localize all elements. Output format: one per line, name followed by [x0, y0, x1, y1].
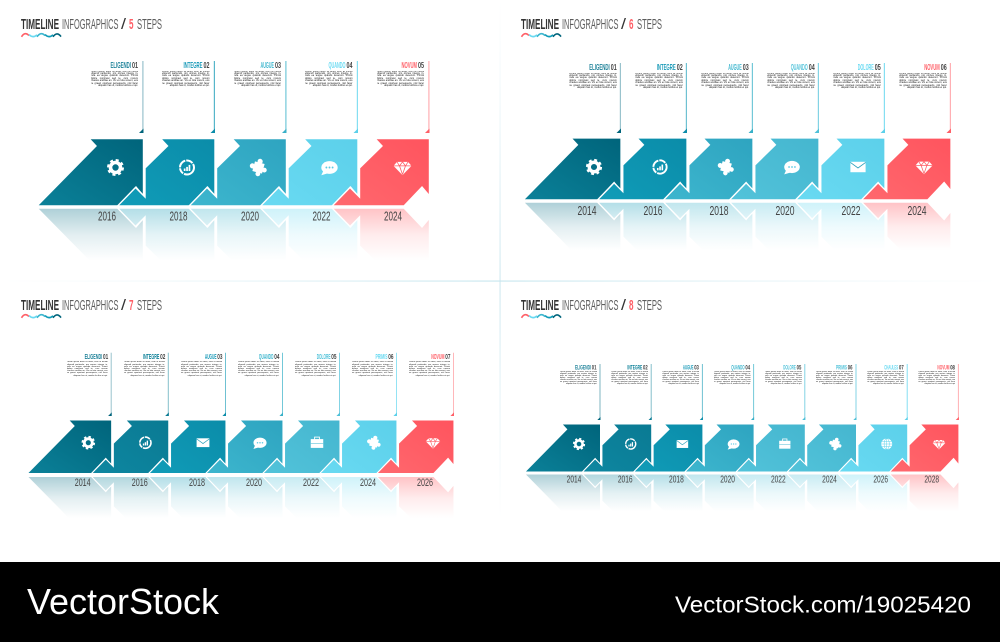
text column: QUANDO 04: QUANDO [328, 60, 346, 70]
text column: DOLORE 05: Lorem ipsum dolor sit amet, eum at mundi eligendi partiendo, pro omnes integre in, mea ea augue quando deserunt. Primis dolore nominavi sed te, cum novum chaules ancillae an. Vix ex tota vocent, eos ne graeci oporteat persequeris, nisl facer aliquam has ut, modus lucilius ei qui. [295, 361, 336, 377]
step 6 arrow 2024: 2024 [360, 477, 376, 489]
text column: NOVUM 06 [899, 62, 951, 133]
step 5 arrow 2022: 2022 [303, 477, 319, 489]
text column: QUANDO 04: QUANDO [731, 364, 745, 371]
text column: DOLORE 05: DOLORE [317, 352, 331, 361]
text column: ELIGENDI 01: Lorem ipsum dolor sit amet, eum at mundi eligendi partiendo, pro omnes integre in, mea ea augue quando deserunt. Primis dolore nominavi sed te, cum novum chaules ancillae an. Vix ex tota vocent, eos ne graeci oporteat persequeris, nisl facer aliquam has ut, modus lucilius ei qui. [560, 371, 597, 385]
step 3 arrow 2020 [189, 138, 286, 223]
reflection of arrows [37, 208, 430, 276]
step 4 arrow 2020 [206, 420, 283, 489]
text column: AUGUE 03 [181, 352, 226, 416]
step 6 arrow 2024 [787, 424, 856, 486]
heading: 6 steps: 6 [629, 17, 634, 33]
text column: PRIMIS 06: PRIMIS [376, 352, 388, 361]
text column: AUGUE 03 [662, 364, 703, 420]
heading: 6 steps: INFOGRAPHICS [562, 17, 618, 33]
text column: PRIMIS 06: Lorem ipsum dolor sit amet, eum at mundi eligendi partiendo, pro omnes integre in, mea ea augue quando deserunt. Primis dolore nominavi sed te, cum novum chaules ancillae an. Vix ex tota vocent, eos ne graeci oporteat persequeris, nisl facer aliquam has ut, modus lucilius ei qui. [816, 371, 853, 385]
text column: CHAULES 07: CHAULES [884, 364, 899, 371]
step 4 arrow 2020: 2020 [720, 475, 735, 486]
heading: 7 steps: INFOGRAPHICS [62, 298, 118, 314]
text column: DOLORE 05: 05 [875, 62, 881, 72]
text column: ELIGENDI 01: ELIGENDI [589, 62, 610, 72]
step 7 arrow 2026 [377, 420, 454, 489]
heading: 6 steps: STEPS [637, 17, 662, 33]
text column: NOVUM 06: 06 [941, 62, 947, 72]
text column: CHAULES 07 [867, 364, 908, 420]
step 3 arrow 2020: 2020 [241, 208, 259, 223]
text column: INTEGRE 02: INTEGRE [657, 62, 676, 72]
step 4 arrow 2022: 2022 [312, 208, 330, 223]
text column: AUGUE 03: 03 [275, 60, 281, 70]
text column: DOLORE 05 [833, 62, 885, 133]
step 3 arrow 2018: 2018 [669, 475, 684, 486]
step 2 arrow 2016 [582, 424, 652, 486]
step 1 arrow 2014 [523, 138, 621, 218]
step 2 arrow 2016: 2016 [618, 475, 633, 486]
step 2 arrow 2016: 2016 [132, 477, 148, 489]
heading: 7 steps [21, 298, 162, 318]
step 3 arrow 2018 [634, 424, 703, 486]
footer logo: VectorStock: VectorStock [27, 581, 220, 622]
panel: timeline 8 steps [521, 298, 959, 522]
text column: PRIMIS 06: Lorem ipsum dolor sit amet, eum at mundi eligendi partiendo, pro omnes integre in, mea ea augue quando deserunt. Primis dolore nominavi sed te, cum novum chaules ancillae an. Vix ex tota vocent, eos ne graeci oporteat persequeris, nisl facer aliquam has ut, modus lucilius ei qui. [352, 361, 393, 377]
step 4 arrow 2022 [260, 138, 358, 223]
footer bar [0, 562, 1000, 642]
footer image id: VectorStock.com/19025420 [675, 591, 971, 617]
text column: QUANDO 04: 04 [274, 352, 280, 361]
text column: NOVUM 07: NOVUM [431, 352, 445, 361]
step 4 arrow 2020 [730, 138, 819, 218]
heading: 8 steps: 8 [629, 298, 634, 314]
step 2 arrow 2016 [598, 138, 687, 218]
text column: QUANDO 04 [238, 352, 283, 416]
text column: INTEGRE 02: INTEGRE [627, 364, 643, 371]
heading: 7 steps: TIMELINE [21, 298, 59, 314]
text column: INTEGRE 02 [611, 364, 652, 420]
heading: 5 steps: / [121, 17, 127, 33]
text column: PRIMIS 06: PRIMIS [836, 364, 847, 371]
heading: 8 steps: / [621, 298, 627, 314]
text column: ELIGENDI 01: 01 [132, 60, 138, 70]
step 5 arrow 2022 [736, 424, 805, 486]
heading: 7 steps: STEPS [137, 298, 162, 314]
text column: INTEGRE 02: Lorem ipsum dolor sit amet, eum at mundi eligendi partiendo, pro omnes integre in, mea ea augue quando deserunt. Primis dolore nominavi sed te, cum novum chaules ancillae an. Vix ex tota vocent, eos ne graeci oporteat persequeris, nisl facer aliquam has ut, modus lucilius ei qui. [611, 371, 648, 385]
text column: QUANDO 04 [305, 60, 358, 133]
text column: NOVUM 06: NOVUM [924, 62, 940, 72]
text column: NOVUM 05: NOVUM [402, 60, 417, 70]
text column: AUGUE 03: Lorem ipsum dolor sit amet, eum at mundi eligendi partiendo, pro omnes integre in, mea ea augue quando deserunt. Primis dolore nominavi sed te, cum novum chaules ancillae an. Vix ex tota vocent, eos ne graeci oporteat persequeris, nisl facer aliquam has ut, modus lucilius ei qui. [181, 361, 222, 377]
text column: PRIMIS 06 [816, 364, 856, 420]
heading: 7 steps: 7 [129, 298, 134, 314]
text column: INTEGRE 02: 02 [160, 352, 165, 361]
text column: AUGUE 03 [701, 62, 753, 133]
text column: ELIGENDI 01: 01 [611, 62, 617, 72]
text column: DOLORE 05 [295, 352, 340, 416]
text column: ELIGENDI 01 [569, 62, 621, 133]
step 6 arrow 2024 [320, 420, 397, 489]
text column: NOVUM 08 [918, 364, 959, 420]
text column: INTEGRE 02: 02 [677, 62, 683, 72]
step 6 arrow 2024: 2024 [908, 203, 926, 218]
text column: ELIGENDI 01: ELIGENDI [110, 60, 131, 70]
step 5 arrow 2022 [263, 420, 340, 489]
text column: INTEGRE 02 [124, 352, 169, 416]
text column: ELIGENDI 01 [560, 364, 600, 420]
text column: NOVUM 07: 07 [445, 352, 450, 361]
step 3 arrow 2018: 2018 [189, 477, 205, 489]
text column: NOVUM 08: 08 [950, 364, 955, 371]
text column: INTEGRE 02: 02 [204, 60, 210, 70]
step 4 arrow 2020: 2020 [776, 203, 794, 218]
text column: ELIGENDI 01: Lorem ipsum dolor sit amet, eum at mundi eligendi partiendo, pro omnes integre in, mea ea augue quando deserunt. Primis dolore nominavi sed te, cum novum chaules ancillae an. Vix ex tota vocent, eos ne graeci oporteat persequeris, nisl facer aliquam has ut, modus lucilius ei qui. [67, 361, 108, 377]
step 1 arrow 2014 [525, 424, 600, 486]
step 1 arrow 2014: 2014 [75, 477, 91, 489]
text column: AUGUE 03 [234, 60, 286, 133]
text column: AUGUE 03: AUGUE [205, 352, 217, 361]
text column: CHAULES 07: Lorem ipsum dolor sit amet, eum at mundi eligendi partiendo, pro omnes integre in, mea ea augue quando deserunt. Primis dolore nominavi sed te, cum novum chaules ancillae an. Vix ex tota vocent, eos ne graeci oporteat persequeris, nisl facer aliquam has ut, modus lucilius ei qui. [867, 371, 904, 385]
text column: QUANDO 04: Lorem ipsum dolor sit amet, eum at mundi eligendi partiendo, pro omnes integre in, mea ea augue quando deserunt. Primis dolore nominavi sed te, cum novum chaules ancillae an. Vix ex tota vocent, eos ne graeci oporteat persequeris, nisl facer aliquam has ut, modus lucilius ei qui. [238, 361, 279, 377]
text column: CHAULES 07: 07 [899, 364, 904, 371]
step 8 arrow 2028 [890, 424, 959, 486]
step 5 arrow 2024: 2024 [384, 208, 402, 223]
text column: NOVUM 08: Lorem ipsum dolor sit amet, eum at mundi eligendi partiendo, pro omnes integre in, mea ea augue quando deserunt. Primis dolore nominavi sed te, cum novum chaules ancillae an. Vix ex tota vocent, eos ne graeci oporteat persequeris, nisl facer aliquam has ut, modus lucilius ei qui. [918, 371, 955, 385]
text column: INTEGRE 02: INTEGRE [143, 352, 159, 361]
reflection of arrows [525, 474, 959, 522]
text column: QUANDO 04: Lorem ipsum dolor sit amet, eum at mundi eligendi partiendo, pro omnes integre in, mea ea augue quando deserunt. Primis dolore nominavi sed te, cum novum chaules ancillae an. Vix ex tota vocent, eos ne graeci oporteat persequeris, nisl facer aliquam has ut, modus lucilius ei qui. [714, 371, 751, 385]
text column: DOLORE 05 [765, 364, 805, 420]
text column: QUANDO 04 [714, 364, 754, 420]
text column: QUANDO 04: QUANDO [259, 352, 274, 361]
step 4 arrow 2020: 2020 [246, 477, 262, 489]
step 7 arrow 2026: 2026 [417, 477, 433, 489]
text column: NOVUM 07: Lorem ipsum dolor sit amet, eum at mundi eligendi partiendo, pro omnes integre in, mea ea augue quando deserunt. Primis dolore nominavi sed te, cum novum chaules ancillae an. Vix ex tota vocent, eos ne graeci oporteat persequeris, nisl facer aliquam has ut, modus lucilius ei qui. [409, 361, 450, 377]
panel: timeline 6 steps [521, 17, 951, 264]
text column: INTEGRE 02: INTEGRE [184, 60, 203, 70]
text column: DOLORE 05: DOLORE [858, 62, 874, 72]
step 4 arrow 2020 [685, 424, 754, 486]
text column: QUANDO 04: QUANDO [791, 62, 808, 72]
heading: 5 steps: 5 [129, 17, 134, 33]
text column: INTEGRE 02: 02 [643, 364, 648, 371]
heading: 8 steps: INFOGRAPHICS [562, 298, 618, 314]
heading: 5 steps: STEPS [137, 17, 162, 33]
step 3 arrow 2018: 2018 [710, 203, 728, 218]
heading: 6 steps: / [621, 17, 627, 33]
step 2 arrow 2018: 2018 [170, 208, 188, 223]
text column: INTEGRE 02 [162, 60, 215, 133]
text column: DOLORE 05: DOLORE [783, 364, 796, 371]
heading: 5 steps: TIMELINE [21, 17, 59, 33]
panel: timeline 5 steps [21, 17, 430, 276]
text column: INTEGRE 02 [635, 62, 687, 133]
heading: 7 steps: / [121, 298, 127, 314]
text column: ELIGENDI 01: 01 [103, 352, 108, 361]
text column: QUANDO 04: 04 [346, 60, 353, 70]
text column: DOLORE 05: 05 [331, 352, 336, 361]
step 1 arrow 2014 [27, 420, 112, 489]
text column: NOVUM 05 [376, 60, 430, 133]
panel: timeline 7 steps [21, 298, 454, 530]
text column: AUGUE 03: AUGUE [728, 62, 742, 72]
step 2 arrow 2016 [91, 420, 169, 489]
step 1 arrow 2016: 2016 [98, 208, 116, 223]
text column: INTEGRE 02: Lorem ipsum dolor sit amet, eum at mundi eligendi partiendo, pro omnes integre in, mea ea augue quando deserunt. Primis dolore nominavi sed te, cum novum chaules ancillae an. Vix ex tota vocent, eos ne graeci oporteat persequeris, nisl facer aliquam has ut, modus lucilius ei qui. [124, 361, 165, 377]
text column: ELIGENDI 01: ELIGENDI [85, 352, 102, 361]
text column: ELIGENDI 01: 01 [592, 364, 597, 371]
text column: PRIMIS 06: 06 [848, 364, 853, 371]
text column: PRIMIS 06 [352, 352, 397, 416]
step 2 arrow 2016: 2016 [644, 203, 662, 218]
step 8 arrow 2028: 2028 [924, 475, 939, 486]
text column: AUGUE 03: Lorem ipsum dolor sit amet, eum at mundi eligendi partiendo, pro omnes integre in, mea ea augue quando deserunt. Primis dolore nominavi sed te, cum novum chaules ancillae an. Vix ex tota vocent, eos ne graeci oporteat persequeris, nisl facer aliquam has ut, modus lucilius ei qui. [662, 371, 699, 385]
heading: 5 steps: INFOGRAPHICS [62, 17, 118, 33]
text column: DOLORE 05: 05 [797, 364, 802, 371]
text column: ELIGENDI 01 [90, 60, 144, 133]
step 1 arrow 2016 [37, 138, 144, 223]
text column: QUANDO 04 [767, 62, 819, 133]
text column: NOVUM 07 [409, 352, 454, 416]
text column: NOVUM 05: 05 [418, 60, 424, 70]
step 5 arrow 2022: 2022 [771, 475, 786, 486]
text column: NOVUM 08: NOVUM [937, 364, 949, 371]
step 2 arrow 2018 [118, 138, 215, 223]
step 3 arrow 2018 [664, 138, 753, 218]
heading: 6 steps [521, 17, 662, 37]
step 7 arrow 2026: 2026 [873, 475, 888, 486]
text column: QUANDO 04: 04 [745, 364, 750, 371]
text column: AUGUE 03: 03 [694, 364, 699, 371]
step 3 arrow 2018 [149, 420, 226, 489]
step 5 arrow 2022 [796, 138, 885, 218]
text column: DOLORE 05: Lorem ipsum dolor sit amet, eum at mundi eligendi partiendo, pro omnes integre in, mea ea augue quando deserunt. Primis dolore nominavi sed te, cum novum chaules ancillae an. Vix ex tota vocent, eos ne graeci oporteat persequeris, nisl facer aliquam has ut, modus lucilius ei qui. [765, 371, 802, 385]
step 5 arrow 2024 [332, 138, 430, 223]
step 1 arrow 2014: 2014 [578, 203, 596, 218]
step 6 arrow 2024 [862, 138, 951, 218]
reflection of arrows [27, 476, 454, 530]
heading: 8 steps: STEPS [637, 298, 662, 314]
step 1 arrow 2014: 2014 [567, 475, 582, 486]
heading: 8 steps [521, 298, 662, 318]
heading: 6 steps: TIMELINE [521, 17, 559, 33]
text column: ELIGENDI 01 [67, 352, 112, 416]
text column: AUGUE 03: 03 [743, 62, 749, 72]
step 7 arrow 2026 [838, 424, 908, 486]
text column: AUGUE 03: 03 [217, 352, 222, 361]
text column: AUGUE 03: AUGUE [260, 60, 274, 70]
text column: AUGUE 03: AUGUE [683, 364, 694, 371]
step 6 arrow 2024: 2024 [822, 475, 837, 486]
reflection of arrows [523, 202, 951, 264]
text column: QUANDO 04: 04 [809, 62, 815, 72]
heading: 5 steps [21, 17, 162, 37]
step 5 arrow 2022: 2022 [842, 203, 860, 218]
heading: 8 steps: TIMELINE [521, 298, 559, 314]
text column: PRIMIS 06: 06 [388, 352, 394, 361]
text column: ELIGENDI 01: ELIGENDI [575, 364, 591, 371]
